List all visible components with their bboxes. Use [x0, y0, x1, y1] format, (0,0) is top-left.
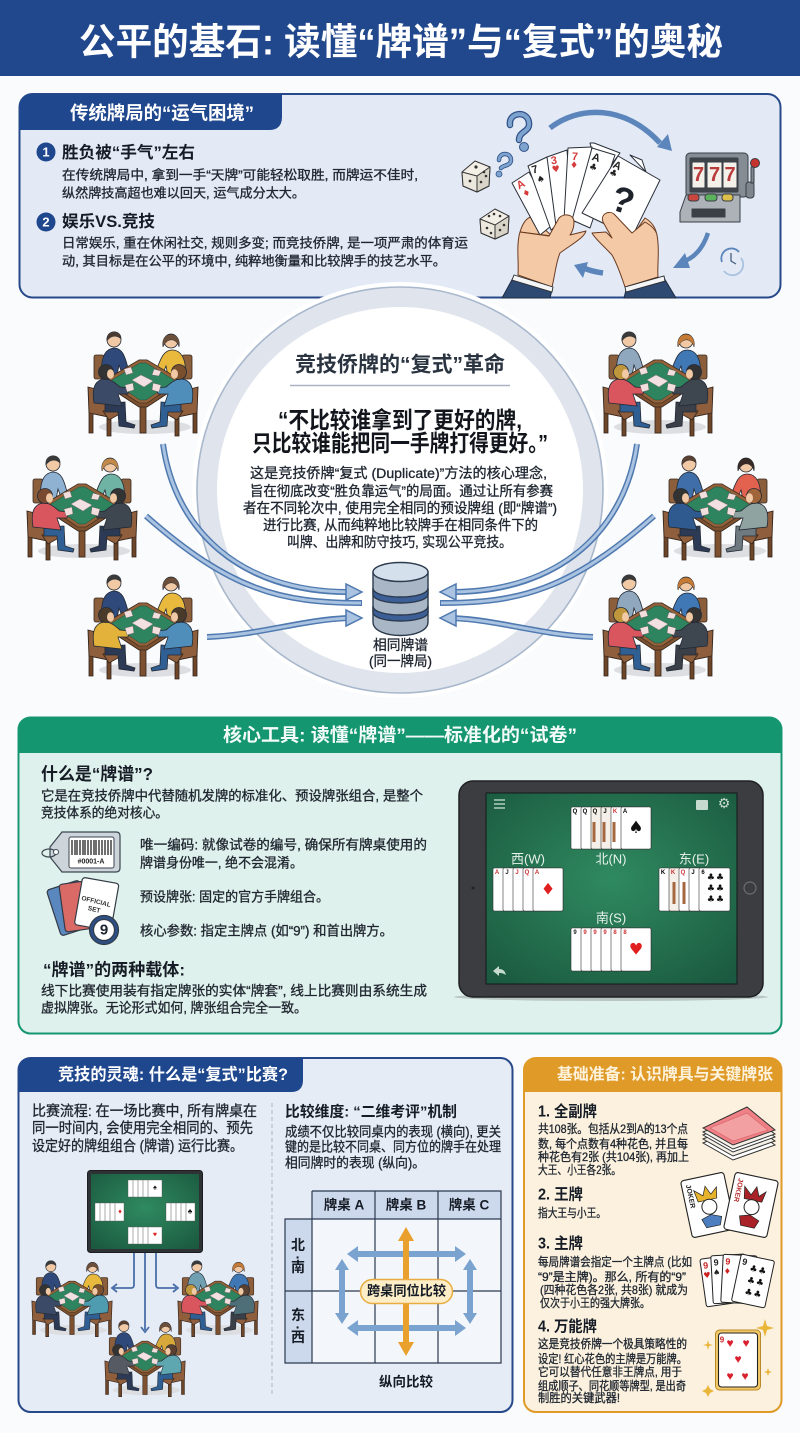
- blue comparison arrows: [335, 1246, 477, 1336]
- item 3: trump: [538, 1234, 692, 1310]
- what is a board: 竞技体系的绝对核心。: [41, 804, 168, 820]
- icon: wild card with sparkles: ♥: [741, 1369, 749, 1383]
- hand: south: 9: [583, 930, 587, 936]
- panel tab heading: [18, 1058, 303, 1092]
- icon: nine cards: 9: [713, 1257, 719, 1268]
- panel header: 基础准备: 认识牌具与关键牌张: [557, 1064, 773, 1084]
- mini screen: [88, 1170, 202, 1252]
- pull quote: [252, 407, 548, 456]
- item 4: wild card: [538, 1316, 687, 1405]
- text: comparison dimension: 键的是比较不同桌、同方位的牌手在处理: [285, 1138, 501, 1154]
- distribution arrows: [112, 1253, 178, 1332]
- icon: arc arrow to slot machine: [550, 112, 672, 151]
- table middle left: [27, 456, 137, 560]
- row headers: [291, 1237, 305, 1345]
- hand: east: 6: [701, 870, 705, 876]
- item 4: wild card: 组成顺子、同花顺等牌型, 是出奇: [538, 1378, 686, 1393]
- item 4: wild card: 设定! 红心花色的主牌是万能牌。: [538, 1351, 687, 1366]
- comparison matrix: [285, 1191, 501, 1390]
- item 3: trump: “9”是主牌)。那么, 所有的“9”: [538, 1269, 686, 1284]
- panel: duplicate revolution circle: [27, 282, 773, 698]
- icon: nine cards: 9: [725, 1256, 731, 1267]
- panel: traditional card game luck dilemma: [20, 94, 780, 298]
- item 1: luck decides: 胜负被“手气”左右: [62, 142, 195, 162]
- panel tab heading: 传统牌局的“运气困境”: [70, 102, 254, 124]
- item 3: trump: 仅次于小王的强大牌张。: [540, 1295, 650, 1310]
- hand: north: J: [603, 809, 607, 815]
- icon: question marks: [496, 114, 529, 177]
- cards: [512, 143, 660, 237]
- mini table bottom: [105, 1321, 185, 1397]
- hand: south: 9: [593, 930, 597, 936]
- tablet toolbar icons: ⚙: [718, 796, 730, 812]
- hand: north: Q: [573, 809, 578, 815]
- panel tab heading: [20, 94, 282, 130]
- header banner: [0, 0, 800, 76]
- mini screen: ♣: [188, 1208, 193, 1216]
- database label: 相同牌谱: [373, 637, 428, 653]
- card ranks: ♣: [588, 162, 598, 174]
- icon: wild card with sparkles: ♥: [726, 1336, 734, 1350]
- item 4: wild card: 4. 万能牌: [538, 1316, 597, 1336]
- mini table left: [32, 1261, 112, 1337]
- item 2: entertainment vs competition: 2: [42, 214, 50, 230]
- item 4: wild card: 它可以替代任意非王牌点, 用于: [538, 1364, 682, 1379]
- card ranks: ♦: [521, 188, 533, 200]
- hand: west: Q: [525, 870, 530, 876]
- icon: database: [373, 562, 428, 636]
- icon: official card set with badge: [46, 877, 119, 944]
- table bottom right: [603, 575, 713, 679]
- heading: duplicate revolution: 竞技侨牌的“复式”革命: [295, 352, 505, 376]
- text: core parameters: 核心参数: 指定主牌点 (如“9”) 和首出牌方。: [140, 922, 393, 938]
- column headers: 牌桌 A: [324, 1196, 365, 1212]
- icon: joker cards: JOKER: [684, 1184, 696, 1209]
- hand: west: J: [515, 870, 519, 876]
- item 3: trump: 每局牌谱会指定一个主牌点 (比如: [538, 1254, 692, 1269]
- panel: basic preparation: [524, 1058, 782, 1412]
- what is a board: 它是在竞技侨牌中代替随机发牌的标准化、预设牌张组合, 是整个: [41, 788, 423, 804]
- text: unique code: 牌谱身份唯一, 绝不会混淆。: [140, 854, 303, 870]
- icon: card deck: [703, 1107, 775, 1160]
- card ranks: ♣: [607, 168, 619, 180]
- tablet: [454, 781, 768, 1001]
- text: comparison dimension: 比较维度: “二维考评”机制: [285, 1102, 457, 1120]
- hand: north: Q: [583, 809, 588, 815]
- hand: north: ♠: [628, 818, 644, 838]
- axis label: 纵向比较: [379, 1374, 433, 1390]
- description: 叫牌、出牌和防守技巧, 实现公平竞技。: [287, 534, 512, 550]
- callout pill: [360, 1280, 452, 1304]
- text: unique code: [140, 836, 427, 870]
- two carriers: [41, 960, 427, 1016]
- item 2: entertainment vs competition: 动, 其目标是在公平的环境中, 纯粹地衡量和比较牌手的技艺水平。: [62, 254, 446, 268]
- icon: nine cards: ♠: [713, 1268, 720, 1277]
- hand: east: ♣♣: [707, 873, 725, 883]
- item 2: entertainment vs competition: 日常娱乐, 重在休闲社交, 规则多变; 而竞技侨牌, 是一项严肃的体育运: [62, 236, 468, 250]
- icon: official card set with badge: 9: [100, 922, 108, 938]
- item 1: luck decides: 在传统牌局中, 拿到一手“天牌”可能轻松取胜, 而牌运不佳时,: [62, 168, 418, 182]
- card ranks: A: [611, 159, 623, 173]
- icon: slot machine: 7: [724, 164, 736, 186]
- icon: dice: [462, 161, 509, 239]
- panel: core tool board: [18, 718, 782, 1034]
- table top left: [88, 332, 198, 436]
- icon: nine cards: ♣♣: [746, 1276, 766, 1289]
- row headers: ·: [296, 1319, 300, 1335]
- text: process: 设定好的牌组组合 (牌谱) 运行比赛。: [32, 1138, 243, 1155]
- item 1: luck decides: 1: [42, 144, 50, 160]
- seat labels: 北(N): [595, 852, 627, 866]
- panel header: 核心工具: 读懂“牌谱”——标准化的“试卷”: [223, 724, 577, 746]
- item 1: full deck: 数, 每个点数有4种花色, 并且每: [538, 1136, 688, 1151]
- icon: wild card with sparkles: [702, 1319, 774, 1397]
- row headers: 北: [291, 1237, 305, 1253]
- seat labels: 西(W): [511, 852, 545, 866]
- two carriers: 线下比赛使用装有指定牌张的实体“牌套”, 线上比赛则由系统生成: [41, 982, 427, 998]
- icon: return arrows and clock: [574, 233, 743, 278]
- item 2: jokers: 指大王与小王。: [538, 1205, 606, 1220]
- database label: [369, 637, 432, 669]
- row headers: 西: [291, 1329, 305, 1345]
- icon: wild card with sparkles: 9: [720, 1336, 725, 1344]
- item 2: entertainment vs competition: 娱乐VS.竞技: [62, 211, 155, 231]
- text: comparison dimension: 相同牌时的表现 (纵向)。: [285, 1154, 425, 1170]
- table middle right: [663, 456, 773, 560]
- card ranks: ♠: [536, 174, 546, 186]
- item 2: jokers: 2. 王牌: [538, 1186, 583, 1204]
- item 2: entertainment vs competition: [36, 211, 468, 268]
- icon: nine cards: [700, 1254, 775, 1308]
- icon: barcode tag: #0001-A: [78, 858, 104, 866]
- database label: (同一牌局): [369, 653, 432, 669]
- seat labels: 南(S): [596, 910, 626, 926]
- panel tab heading: 竞技的灵魂: 什么是“复式”比赛?: [58, 1064, 288, 1084]
- cuffs: [512, 275, 665, 292]
- pull quote: “不比较谁拿到了更好的牌,: [278, 407, 522, 433]
- card ranks: 3: [550, 155, 558, 167]
- row headers: ·: [296, 1249, 300, 1265]
- text: comparison dimension: 成绩不仅比较同桌内的表现 (横向), 更关: [285, 1124, 501, 1140]
- hand: west: J: [505, 870, 509, 876]
- seat labels: [511, 852, 709, 926]
- icon: official card set with badge: OFFICIAL: [81, 895, 111, 909]
- icon: nine cards: 9: [703, 1260, 709, 1271]
- item 1: luck decides: [36, 142, 418, 200]
- item 4: wild card: 制胜的关键武器!: [538, 1390, 620, 1405]
- mini table right: [178, 1261, 258, 1337]
- icon: nine cards: ♣♣: [743, 1288, 763, 1301]
- hand: south: 8: [613, 930, 617, 936]
- icon: joker cards: [680, 1172, 779, 1238]
- seat labels: 东(E): [679, 852, 709, 866]
- icon: slot machine: [680, 153, 760, 222]
- tablet toolbar icons: [493, 796, 730, 976]
- hand: east: ♣♣: [707, 895, 725, 905]
- description: 进行比赛, 从而纯粹地比较牌手在相同条件下的: [263, 517, 538, 533]
- hand: east: J: [691, 870, 695, 876]
- title: 公平的基石: 读懂“牌谱”与“复式”的奥秘: [79, 22, 723, 62]
- text: process: [32, 1103, 257, 1155]
- card ranks: 7: [530, 163, 540, 177]
- icon: nine cards: ♣♣: [748, 1264, 768, 1278]
- callout pill: 跨桌同位比较: [367, 1282, 446, 1298]
- fingers behind cards: [520, 217, 657, 236]
- panel header: [524, 1058, 782, 1092]
- item 1: full deck: 大王、小王各2张。: [538, 1162, 621, 1177]
- row headers: 东: [291, 1307, 305, 1323]
- icon: official card set with badge: SET: [87, 905, 101, 915]
- hand: south: ♥: [629, 940, 643, 958]
- item 3: trump: 3. 主牌: [538, 1234, 583, 1252]
- column headers: 牌桌 B: [386, 1196, 427, 1212]
- hand: east: ♣♣: [707, 884, 725, 894]
- hand: north: Q: [593, 809, 598, 815]
- icon: barcode tag: [42, 832, 120, 872]
- hands front: [518, 212, 658, 287]
- column headers: [324, 1196, 490, 1212]
- icon: slot machine: 7: [709, 164, 720, 186]
- icon: nine cards: ♥: [703, 1271, 711, 1280]
- hand: north: K: [613, 809, 618, 815]
- card ranks: ♦: [570, 161, 578, 171]
- icon: fanned playing cards held in hands: [502, 143, 676, 298]
- card ranks: ?: [606, 177, 640, 223]
- flow arrows to shared deck: [146, 444, 654, 637]
- item 1: luck decides: 纵然牌技高超也难以回天, 运气成分太大。: [62, 186, 305, 200]
- two carriers: 虚拟牌张。无论形式如何, 牌张组合完全一致。: [41, 1000, 307, 1016]
- hand: east: K: [671, 870, 676, 876]
- description: 旨在彻底改变“胜负靠运气”的局面。通过让所有参赛: [250, 483, 553, 499]
- card ranks: [515, 151, 640, 223]
- hand: east: Q: [681, 870, 686, 876]
- text: process: 同一时间内, 会使用完全相同的、预先: [32, 1119, 253, 1137]
- text: process: 比赛流程: 在一场比赛中, 所有牌桌在: [32, 1103, 257, 1120]
- card ranks: 7: [572, 151, 578, 163]
- description: [243, 465, 557, 550]
- sleeves: [502, 278, 676, 298]
- text: preset cards: 预设牌张: 固定的官方手牌组合。: [140, 888, 329, 904]
- text: comparison dimension: [285, 1102, 501, 1170]
- icon: wild card with sparkles: ♥: [742, 1336, 750, 1350]
- text: unique code: 唯一编码: 就像试卷的编号, 确保所有牌桌使用的: [140, 836, 427, 852]
- hand: south: 9: [573, 930, 577, 936]
- mini screen: ♥: [153, 1232, 157, 1238]
- hand: south: 9: [603, 930, 607, 936]
- hand: west: [493, 868, 563, 911]
- description: 者在不同轮次中, 使用完全相同的预设牌组 (即“牌谱”): [243, 500, 557, 516]
- hand: west: A: [535, 870, 540, 876]
- card ranks: A: [515, 178, 527, 192]
- card ranks: ♥: [551, 164, 561, 176]
- description: 这是竞技侨牌“复式 (Duplicate)”方法的核心理念,: [250, 465, 547, 481]
- icon: nine cards: ♦: [724, 1267, 731, 1276]
- item 1: full deck: 共108张。包括从2到A的13个点: [538, 1121, 688, 1136]
- icon: joker cards: JOKER: [732, 1177, 744, 1203]
- ring: [192, 282, 608, 698]
- item 1: full deck: 1. 全副牌: [538, 1102, 597, 1120]
- card ranks: A: [590, 151, 602, 165]
- what is a board: 什么是“牌谱”?: [41, 764, 153, 784]
- hand: east: K: [661, 870, 666, 876]
- panel: what is duplicate competition: [18, 1058, 512, 1412]
- mini screen: ♠: [153, 1184, 157, 1192]
- hand: west: ♦: [541, 880, 555, 898]
- table top right: [603, 332, 713, 436]
- hand: east: [659, 868, 730, 911]
- icon: wild card with sparkles: ♥: [726, 1369, 734, 1383]
- what is a board: [41, 764, 423, 820]
- hand: west: A: [495, 870, 500, 876]
- item 1: full deck: 种花色有2张 (共104张), 再加上: [538, 1149, 689, 1164]
- two carriers: “牌谱”的两种载体:: [43, 960, 185, 980]
- item 4: wild card: 这是竞技侨牌一个极具策略性的: [538, 1336, 687, 1351]
- item 2: jokers: [538, 1186, 606, 1220]
- orange vertical arrow: [398, 1227, 414, 1356]
- table bottom left: [88, 575, 198, 679]
- item 3: trump: (四种花色各2张, 共8张) 就成为: [540, 1282, 688, 1297]
- hand: south: [571, 928, 651, 971]
- hand: north: A: [623, 809, 628, 815]
- hand: south: 8: [623, 930, 627, 936]
- hand: north: [571, 807, 651, 849]
- pull quote: 只比较谁能把同一手牌打得更好。”: [252, 430, 548, 456]
- panel header: [18, 718, 782, 753]
- icon: wild card with sparkles: ♥: [734, 1352, 742, 1366]
- column headers: 牌桌 C: [449, 1196, 490, 1212]
- mini screen: ♦: [118, 1208, 122, 1216]
- icon: slot machine: 7: [693, 164, 704, 186]
- item 1: full deck: [538, 1102, 689, 1177]
- icon: nine cards: 9: [741, 1256, 748, 1267]
- row headers: 南: [291, 1259, 305, 1275]
